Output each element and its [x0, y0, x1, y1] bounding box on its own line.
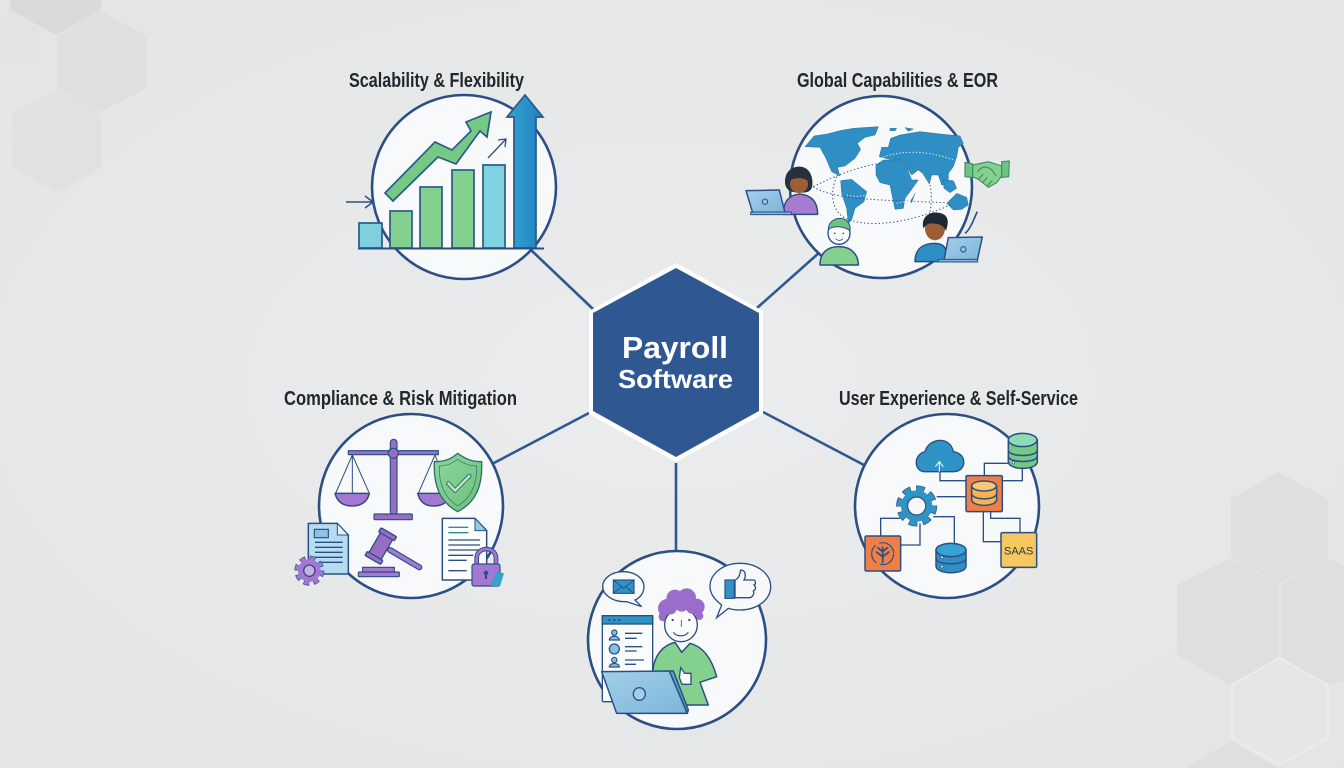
icon: SAAS tile — [1001, 533, 1037, 567]
icon: legal and compliance — [297, 439, 504, 586]
icon: SaaS system network — [865, 433, 1037, 573]
person with laptop, left — [746, 167, 818, 215]
person, bottom centre — [820, 218, 858, 265]
heading: User Experience & Self-Service: User Experience & Self-Service — [839, 388, 1078, 410]
panel: Self-Service employee — [588, 551, 771, 729]
person — [653, 588, 717, 705]
icon: contract with padlock — [442, 518, 504, 586]
central hexagon: Payroll Software — [589, 263, 763, 462]
central hexagon: Payroll Software: Software — [618, 364, 733, 394]
profile window — [602, 616, 653, 702]
heading: Scalability & Flexibility: Scalability & Flexibility — [349, 70, 525, 92]
heading: Global Capabilities & EOR: Global Capabilities & EOR — [797, 70, 998, 92]
scales of justice — [335, 439, 450, 520]
dotted routes — [813, 163, 953, 223]
icon: cloud — [916, 440, 964, 472]
panel: User Experience & Self-Service — [839, 388, 1078, 598]
heading: Compliance & Risk Mitigation: Compliance & Risk Mitigation — [284, 388, 517, 410]
icon: document with gear — [297, 523, 348, 583]
laptop — [602, 671, 688, 713]
panel: Compliance & Risk Mitigation — [284, 388, 517, 598]
icon: green database — [1008, 433, 1037, 468]
circle — [790, 96, 972, 278]
thumbs-up speech bubble — [710, 563, 771, 618]
world map — [805, 127, 968, 223]
icon: gavel — [358, 528, 419, 577]
icon: employee using laptop with feedback bubbles — [602, 563, 771, 713]
envelope speech bubble — [603, 572, 644, 607]
icon: orange leaf tile — [865, 536, 901, 571]
connectors — [881, 463, 1022, 545]
panel: Global Capabilities & EOR — [746, 70, 1009, 278]
circle — [855, 414, 1039, 598]
person with laptop, right — [915, 212, 982, 262]
icon: SAAS tile: SAAS — [1004, 545, 1033, 557]
icon: blue database — [936, 543, 966, 573]
connector lines — [492, 250, 864, 552]
panel: Scalability & Flexibility — [346, 70, 556, 279]
circle — [319, 414, 503, 598]
icon: world map with people — [746, 127, 1009, 265]
icon: gear — [900, 489, 933, 523]
circle — [372, 95, 556, 279]
icon: shield with check — [434, 453, 482, 512]
icon: handshake — [965, 161, 1009, 187]
icon: orange database tile — [966, 476, 1002, 512]
icon: growth bar chart with arrows — [346, 95, 544, 248]
circle — [588, 551, 766, 729]
central hexagon: Payroll Software: Payroll — [622, 330, 728, 365]
